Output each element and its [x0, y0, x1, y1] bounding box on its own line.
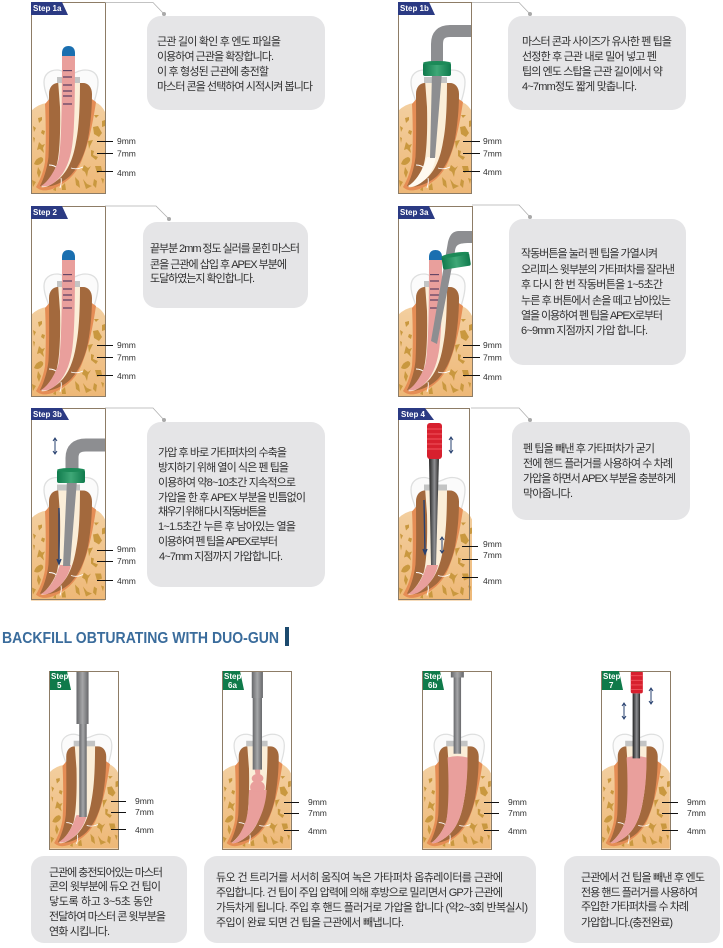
- step tag 7: Step: [603, 672, 620, 681]
- callout 3b: 방지하기 위해 열이 식은 펜 팁을: [158, 460, 289, 474]
- depth marks 6a: 4mm: [308, 826, 327, 836]
- depth marks 5: 4mm: [135, 825, 154, 835]
- depth marks 4: [462, 539, 502, 586]
- depth marks 7: 4mm: [687, 826, 706, 836]
- depth marks 6b: [484, 797, 527, 836]
- step tag 4: [398, 408, 434, 420]
- callout 3b: [147, 422, 325, 587]
- depth marks 2: 9mm: [117, 340, 136, 350]
- callout 3b: 가압을 한 후 APEX 부분을 빈틈없이: [158, 491, 306, 504]
- depth marks 4: 9mm: [483, 539, 502, 549]
- callout 6: 듀오 건 트리거를 서서히 움직여 녹은 가타퍼차 옵츄레이터를 근관에: [216, 870, 503, 884]
- depth marks 1a: 4mm: [117, 168, 136, 178]
- callout 6: [204, 856, 536, 943]
- callout 3b: 이용하여 펜 팁을 APEX로부터: [158, 534, 278, 548]
- callout 3b: 이용하여 약8~10초간 지속적으로: [158, 475, 296, 489]
- depth marks 4: 4mm: [483, 576, 502, 586]
- tooth diagram 6b: [422, 671, 491, 849]
- panel: step 4: [398, 408, 690, 600]
- depth marks 1a: 7mm: [117, 148, 136, 158]
- callout 3b: 가압 후 바로 가타퍼차의 수축을: [158, 446, 287, 459]
- callout 1a: 이 후 형성된 근관에 충전할: [157, 65, 269, 78]
- depth marks 6a: 7mm: [308, 808, 327, 818]
- callout 6: 가득차게 됩니다. 주입 후 핸드 플러거로 가압을 합니다 (약2~3회 반복실시): [216, 900, 528, 914]
- depth marks 3b: 7mm: [117, 556, 136, 566]
- callout 3b: 4~7mm 지점까지 가압합니다.: [159, 550, 283, 563]
- depth marks 1b: 7mm: [483, 148, 502, 158]
- depth marks 1a: [97, 136, 136, 178]
- callout 2: [143, 222, 308, 308]
- tooth diagram 4: [398, 423, 472, 600]
- callout 5: 콘의 윗부분에 듀오 건 팁이: [49, 880, 161, 893]
- depth marks 2: 4mm: [117, 371, 136, 381]
- step tag 5: [50, 671, 71, 690]
- step tag 1a: [31, 2, 68, 15]
- callout 4: 가압을 하면서 APEX 부분을 충분하게: [523, 471, 676, 485]
- arrow: plugger direction: [57, 508, 61, 564]
- arrow: plugger motion right: [440, 537, 444, 553]
- tooth diagram 3a: [398, 231, 472, 397]
- step tag 2: [31, 206, 68, 219]
- tooth diagram 7: [601, 671, 670, 849]
- panel: step 5: [31, 671, 187, 943]
- panel: step 3a: [398, 205, 686, 397]
- callout 7: 근관에서 건 팁을 빼낸 후 엔도: [581, 871, 705, 884]
- callout 3a: 열을 이용하여 펜 팁을 APEX로부터: [521, 308, 663, 322]
- arrow: vertical motion: [449, 437, 453, 453]
- depth marks 1a: 9mm: [117, 136, 136, 146]
- tooth diagram 5: [50, 671, 118, 849]
- callout 3a: 누른 후 버튼에서 손을 떼고 남아있는: [521, 294, 671, 307]
- panel: step 6b: [422, 671, 527, 850]
- callout 3a: [509, 219, 686, 365]
- section heading: BACKFILL OBTURATING WITH DUO-GUN: [2, 630, 279, 647]
- panel: step 1a: [31, 2, 325, 194]
- callout 3a: 작동버튼을 눌러 펜 팁을 가열시켜: [521, 247, 658, 260]
- connector 4: [471, 408, 532, 422]
- callout 2: 콘을 근관에 삽입 후 APEX 부분에: [150, 258, 287, 271]
- callout 1a: 근관 길이 확인 후 엔도 파일을: [157, 34, 281, 48]
- step tag 5: 5: [57, 681, 62, 690]
- callout 6: 주입이 완료 되면 건 팁을 근관에서 빼냅니다.: [216, 916, 404, 929]
- callout 3b: 채우기 위해 다시 작동버튼을: [158, 504, 267, 518]
- connector 1a: [105, 2, 166, 16]
- depth marks 3a: 9mm: [483, 340, 502, 350]
- connector 3a: [472, 205, 532, 219]
- depth marks 6a: 9mm: [308, 797, 327, 807]
- step tag 6b: 6b: [428, 681, 437, 690]
- step tag 6a: [223, 671, 244, 690]
- depth marks 5: 9mm: [135, 796, 154, 806]
- step tag 6b: Step: [424, 672, 441, 681]
- depth marks 1b: [463, 136, 502, 177]
- step tag 3a: [398, 206, 435, 219]
- arrow: plugger direction left: [423, 500, 427, 554]
- plugger handle: [631, 671, 643, 693]
- step tag 7: [602, 671, 623, 690]
- depth marks 5: 7mm: [135, 807, 154, 817]
- depth marks 6b: 7mm: [508, 808, 527, 818]
- callout 3a: 후 다시 한 번 작동버튼을 1~5초간: [521, 278, 663, 291]
- depth marks 1b: 4mm: [483, 167, 502, 177]
- depth marks 7: [662, 797, 706, 836]
- depth marks 6b: 4mm: [508, 826, 527, 836]
- step tag 3b: Step 3b: [33, 410, 62, 419]
- depth marks 5: [111, 796, 154, 835]
- depth marks 2: 7mm: [117, 352, 136, 362]
- step tag 6b: [423, 671, 444, 690]
- callout 6: 주입합니다. 건 팁이 주입 압력에 의해 후방으로 밀리면서 GP가 근관에: [216, 885, 503, 899]
- arrow: vertical motion: [53, 438, 57, 454]
- callout 5: 근관에 충전되어있는 마스터: [49, 866, 163, 879]
- callout 2: 끝부분 2mm 정도 실러를 묻힌 마스터: [150, 242, 300, 255]
- callout 3a: 오리피스 윗부분의 가타퍼차를 잘라낸: [521, 263, 675, 276]
- depth marks 1b: 9mm: [483, 136, 502, 146]
- callout 7: 가압합니다.(충전완료): [581, 916, 673, 929]
- tooth diagram 2: [31, 250, 105, 397]
- tooth diagram 3b: [31, 438, 105, 600]
- depth marks 3a: 7mm: [483, 352, 502, 362]
- callout 3b: 1~1.5초간 누른 후 남아있는 열을: [158, 520, 296, 533]
- callout 4: 펜 팁을 빼낸 후 가타퍼차가 굳기: [523, 442, 655, 455]
- step tag 6a: Step: [224, 672, 241, 681]
- step tag 1b: [398, 2, 435, 15]
- arrow: vertical motion right: [649, 688, 653, 704]
- callout 1a: 마스터 콘을 선택하여 시적시켜 봅니다: [157, 79, 313, 93]
- depth marks 6b: 9mm: [508, 797, 527, 807]
- step tag 6a: 6a: [228, 681, 237, 690]
- tooth diagram 1b: [398, 31, 472, 193]
- panel: step 7: [564, 671, 720, 943]
- depth marks 7: 7mm: [687, 808, 706, 818]
- connector 2: [105, 206, 171, 221]
- callout 7: [564, 856, 720, 943]
- step tag 3a: Step 3a: [400, 208, 429, 217]
- depth marks 3b: 9mm: [117, 544, 136, 554]
- callout 7: 주입한 가타퍼차를 수 차례: [581, 900, 689, 913]
- callout 1b: 팁의 엔도 스탑을 근관 길이에서 약: [522, 64, 663, 78]
- callout 5: 연화 시킵니다.: [49, 925, 110, 938]
- step tag 2: Step 2: [33, 208, 58, 217]
- step tag 4: Step 4: [401, 410, 426, 419]
- tooth diagram 6a: [222, 671, 291, 849]
- step tag 7: 7: [609, 681, 614, 690]
- callout 1a: [147, 16, 325, 110]
- panel: step 2: [31, 206, 308, 397]
- tooth diagram 1a: [31, 46, 105, 193]
- callout 5: 전달하여 마스터 콘 윗부분을: [49, 909, 166, 923]
- connector 3b: [105, 408, 166, 422]
- step tag 1b: Step 1b: [400, 4, 429, 13]
- callout 2: 도달하였는지 확인합니다.: [150, 271, 255, 285]
- callout 1b: [508, 16, 686, 110]
- step tag 3b: [31, 408, 69, 420]
- depth marks 6a: [284, 797, 327, 836]
- depth marks 2: [97, 340, 136, 381]
- panel: step 6a: [222, 671, 327, 850]
- depth marks 3b: [97, 544, 136, 586]
- arrow: vertical motion left: [622, 703, 626, 719]
- callout 5: [31, 856, 187, 943]
- callout 5: 닿도록 하고 3~5초 동안: [49, 894, 153, 908]
- step tag 5: Step: [51, 672, 68, 681]
- callout 3a: 6~9mm 지점까지 가압 합니다.: [521, 324, 648, 337]
- callout 4: 전에 핸드 플러거를 사용하여 수 차례: [523, 456, 673, 470]
- connector 1b: [472, 2, 532, 16]
- callout 4: 막아줍니다.: [523, 487, 573, 500]
- panel: step 1b: [398, 2, 686, 194]
- depth marks 3b: 4mm: [117, 576, 136, 586]
- depth marks 7: 9mm: [687, 797, 706, 807]
- callout 1a: 이용하여 근관을 확장합니다.: [157, 49, 274, 63]
- callout 7: 전용 핸드 플러거를 사용하여: [581, 885, 698, 899]
- callout 1b: 4~7mm정도 짧게 맞춥니다.: [522, 79, 637, 93]
- depth marks 3a: [463, 340, 502, 382]
- step tag 1a: Step 1a: [33, 4, 62, 13]
- depth marks 4: 7mm: [483, 550, 502, 560]
- panel: step 3b: [31, 408, 325, 600]
- callout 4: [512, 422, 690, 520]
- callout 1b: 마스터 콘과 사이즈가 유사한 펜 팁을: [522, 35, 672, 48]
- depth marks 3a: 4mm: [483, 372, 502, 382]
- callout 1b: 선정한 후 근관 내로 밀어 넣고 펜: [522, 50, 657, 63]
